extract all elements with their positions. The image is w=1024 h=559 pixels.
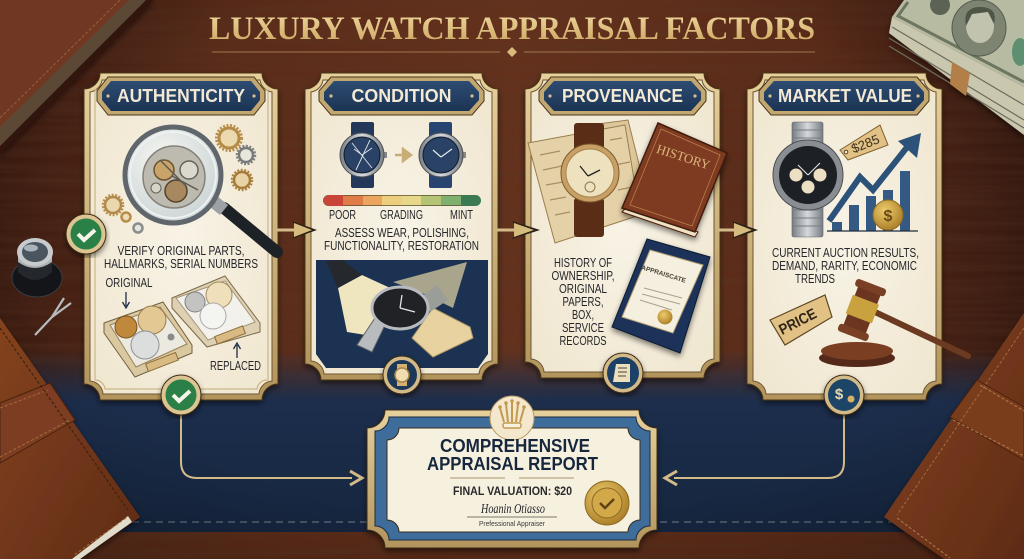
money stack top right — [889, 0, 1024, 135]
icon: history book: HISTORY — [655, 141, 713, 173]
icon: gears — [103, 126, 255, 232]
lamp and watch scene — [316, 260, 488, 368]
text: final valuation: FINAL VALUATION: $20 — [453, 484, 572, 498]
text: condition description: ASSESS WEAR, POLISHING, — [335, 226, 469, 240]
price tag: PRICE — [776, 305, 820, 339]
icon: worn watch — [340, 122, 387, 188]
leather notebook top left — [0, 0, 154, 154]
text: market value description: TRENDS — [795, 272, 835, 286]
label: replaced — [210, 343, 261, 373]
icon: chronograph watch — [773, 122, 843, 237]
chart: rising market: $ — [884, 208, 893, 225]
panel: provenance — [525, 73, 727, 393]
icon: certificate in box: APPRAISCATE — [640, 264, 687, 285]
text: provenance description: PAPERS, — [562, 295, 604, 309]
icon: history book — [622, 123, 727, 237]
arrow: provenance to market value — [718, 221, 758, 239]
panel: comprehensive appraisal report — [367, 396, 657, 548]
heading: report: COMPREHENSIVE — [440, 436, 590, 456]
icon: certificate in box — [612, 239, 710, 353]
icon: restored watch — [419, 122, 466, 188]
icon: replaced parts tray — [172, 276, 260, 347]
heading: condition — [319, 77, 484, 115]
connector: market value to report — [665, 412, 844, 485]
price tag $285: $285 — [849, 131, 882, 156]
icon: watch badge — [383, 356, 421, 394]
text: provenance description: ORIGINAL — [559, 282, 607, 296]
chart: rising market — [827, 133, 921, 231]
arrow: authenticity to condition — [277, 221, 317, 239]
connector: authenticity to report — [181, 412, 362, 485]
text: provenance description: OWNERSHIP, — [552, 269, 614, 283]
heading: report — [427, 436, 598, 474]
icon: check badge bottom — [161, 375, 201, 415]
icon: crown medallion — [490, 396, 534, 440]
price tag — [770, 295, 832, 345]
label: original — [106, 276, 153, 308]
text: condition description: FUNCTIONALITY, RESTORATION — [324, 239, 479, 253]
heading: report: APPRAISAL REPORT — [427, 454, 598, 474]
icon: money badge: $ — [835, 386, 844, 403]
signature: Prefessional Appraiser — [479, 519, 545, 528]
text: authenticity description — [104, 244, 258, 271]
icon: original parts tray — [104, 302, 192, 377]
text: provenance description: BOX, — [572, 308, 594, 322]
heading: market value — [759, 77, 929, 115]
label: replaced: REPLACED — [210, 359, 261, 373]
arrow: condition to provenance — [497, 221, 540, 239]
heading: authenticity: AUTHENTICITY — [117, 86, 245, 106]
grading scale: MINT — [450, 208, 473, 222]
heading: provenance: PROVENANCE — [562, 86, 683, 106]
heading: authenticity — [97, 77, 265, 115]
icon: gavel — [819, 278, 968, 367]
signature — [467, 502, 557, 528]
leather folder bottom left — [0, 318, 140, 559]
text: provenance description: RECORDS — [560, 334, 606, 348]
icon: check badge left — [66, 214, 106, 254]
text: provenance description: HISTORY OF — [554, 256, 612, 270]
grading scale: POOR — [329, 208, 356, 222]
heading: provenance — [539, 77, 706, 115]
icon: magnifying glass over movement — [125, 127, 277, 252]
icon: aged papers — [528, 120, 648, 243]
tweezers — [35, 298, 71, 335]
panel: condition — [305, 73, 498, 394]
icon: scroll badge — [603, 353, 643, 393]
text: condition description — [324, 226, 479, 253]
signature: Hoanin Otiasso — [480, 502, 545, 517]
leather folder bottom right — [884, 313, 1024, 559]
arrow: worn to restored — [395, 149, 411, 161]
price tag $285 — [840, 125, 888, 160]
grading scale: GRADING — [380, 208, 423, 222]
jeweller's loupe — [12, 238, 62, 297]
text: authenticity description: HALLMARKS, SERIAL NUMBERS — [104, 257, 258, 271]
icon: money badge — [824, 375, 864, 415]
text: market value description: DEMAND, RARITY, ECONOMIC — [772, 259, 917, 273]
title: LUXURY WATCH APPRAISAL FACTORS — [209, 11, 815, 47]
text: authenticity description: VERIFY ORIGINAL PARTS, — [118, 244, 244, 258]
heading: condition: CONDITION — [352, 86, 452, 106]
panel: market value — [747, 73, 968, 415]
icon: vintage watch — [561, 123, 619, 237]
icon: gold seal — [585, 481, 629, 525]
text: provenance description — [552, 256, 614, 348]
cloth — [412, 308, 473, 357]
panel: authenticity — [66, 73, 278, 415]
text: provenance description: SERVICE — [562, 321, 604, 335]
navy band — [0, 350, 1024, 559]
label: original: ORIGINAL — [106, 276, 153, 290]
heading: market value: MARKET VALUE — [778, 86, 912, 106]
grading scale — [323, 195, 481, 222]
text: market value description — [772, 246, 919, 286]
text: market value description: CURRENT AUCTION RESULTS, — [772, 246, 919, 260]
